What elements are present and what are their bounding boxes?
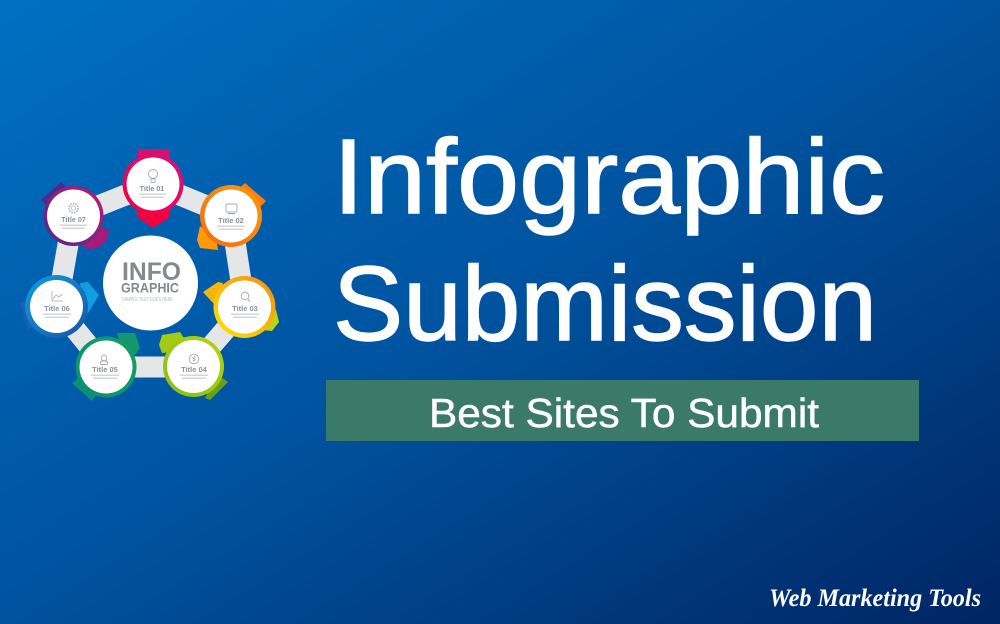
heading: infographic: Infographic [333, 118, 885, 236]
node: title 04: $ [192, 357, 196, 363]
node: title 01 [122, 149, 184, 228]
node: title 04: Title 04 [181, 365, 208, 374]
brand logo text: Web Marketing Tools [769, 585, 981, 612]
center circle: INFO [122, 258, 181, 286]
heading: submission: Submission [333, 245, 877, 363]
center circle: GRAPHIC [121, 280, 179, 296]
center circle: SAMPLE TEXT GOES HERE [122, 297, 174, 303]
node: title 07: Title 07 [61, 215, 86, 224]
subtitle band: Best Sites To Submit [429, 390, 820, 436]
node: title 07 [41, 182, 109, 249]
node: title 06 [20, 275, 99, 338]
center circle [103, 236, 198, 330]
node: title 01: Title 01 [140, 184, 164, 193]
node: title 04 [159, 332, 228, 400]
heptagon connector ring [57, 184, 245, 367]
infographic wheel [20, 149, 279, 401]
node: title 03 [203, 276, 279, 338]
node: title 05: Title 05 [92, 365, 118, 374]
node: title 05 [72, 333, 140, 401]
node: title 02 [197, 183, 266, 250]
node: title 03: Title 03 [232, 304, 258, 313]
subtitle band [326, 380, 919, 441]
node: title 02: Title 02 [218, 216, 244, 225]
node: title 06: Title 06 [44, 304, 70, 313]
